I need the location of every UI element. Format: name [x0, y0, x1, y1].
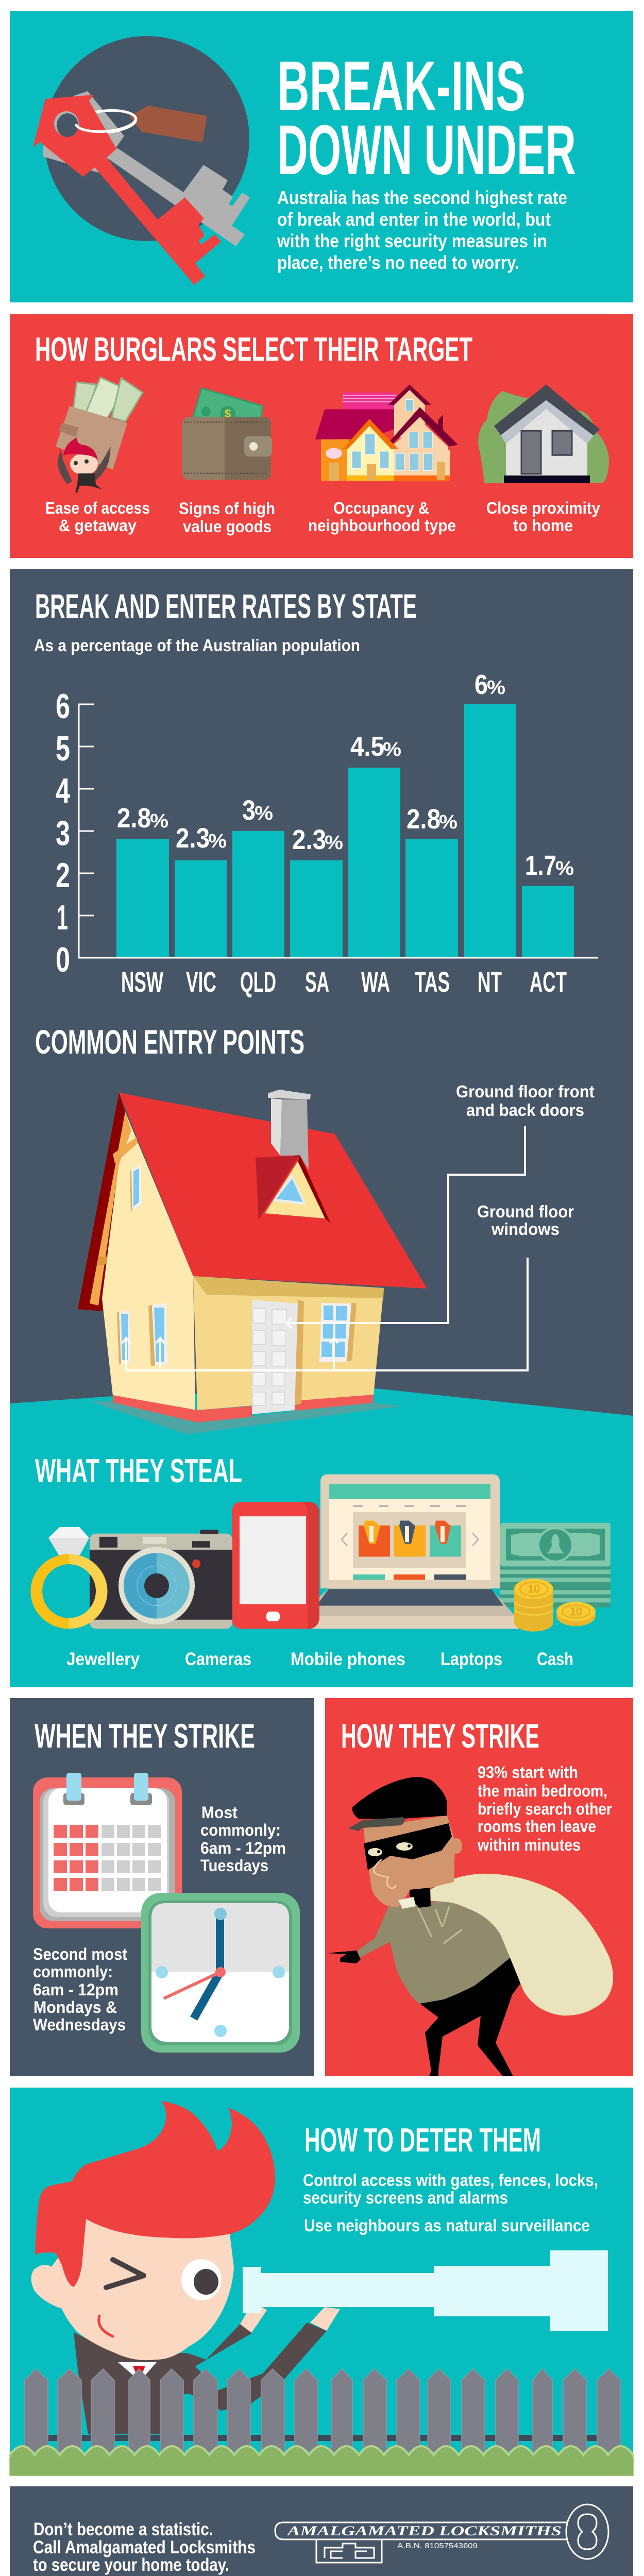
illustration: burglar: [327, 1777, 613, 2076]
fence: [25, 2369, 620, 2451]
stolen item labels: Laptops: [440, 1649, 502, 1669]
icon: calendar: [33, 1773, 182, 1928]
text: second most commonly: Second most: [33, 1945, 127, 1963]
text: most commonly: Tuesdays: [200, 1856, 268, 1875]
ground shadow: [90, 1401, 402, 1434]
icon labels: neighbourhood type: [308, 516, 456, 535]
icon: diamond ring: [30, 1527, 108, 1629]
icon: dark circle: [44, 36, 249, 241]
panel: ground and what they steal: [10, 1388, 633, 1687]
icon: grey key: [43, 91, 250, 246]
text: 93 percent: [477, 1763, 612, 1854]
label: doors: [456, 1082, 595, 1120]
bar chart: [56, 669, 598, 998]
y axis labels: 1: [57, 898, 68, 937]
call to action: [33, 2519, 256, 2575]
y axis labels: 2: [56, 856, 70, 895]
icon: coins: [514, 1579, 596, 1632]
icon: coins: 10: [528, 1583, 540, 1596]
bar value labels: %: [487, 677, 505, 699]
bar value labels: %: [555, 858, 574, 879]
bar value labels: %: [383, 739, 401, 760]
intro text: Australia has the second highest rate: [277, 187, 567, 208]
icon: man carrying wallet: [56, 378, 143, 493]
heading: break and enter rates: [34, 587, 417, 655]
icon: brown wallet with cash: $: [225, 408, 231, 420]
text: most commonly: 6am - 12pm: [200, 1839, 286, 1857]
icon: grey house with trees: [478, 384, 609, 483]
icon: phone: [232, 1502, 319, 1629]
intro text: place, there’s no need to worry.: [277, 252, 519, 273]
bar value labels: %: [255, 803, 273, 824]
text: second most commonly: 6am - 12pm: [33, 1980, 118, 1999]
logo: amalgamated locksmiths key: [275, 2504, 608, 2563]
heading: what they steal: WHAT THEY STEAL: [35, 1452, 242, 1489]
bar value labels: %: [325, 832, 343, 854]
icon labels: Close proximity: [486, 499, 600, 517]
bar value labels: 2.8: [117, 803, 151, 834]
text: 93 percent: rooms then leave: [478, 1817, 596, 1836]
icon: key tag: [129, 106, 207, 142]
text: most commonly: commonly:: [200, 1821, 281, 1839]
panel: footer: [10, 2486, 633, 2576]
icon: laptop: [298, 1475, 521, 1629]
panel: rates and entry points background: [10, 569, 633, 1445]
text: second most commonly: [33, 1945, 127, 2034]
arrow: doors line: [286, 1126, 525, 1328]
icon labels: & getaway: [59, 516, 137, 535]
text: 93 percent: briefly search other: [478, 1800, 612, 1818]
icon labels: to home: [513, 516, 573, 535]
icon: camera: [90, 1530, 232, 1629]
y axis labels: 3: [56, 814, 70, 853]
call to action: Don’t become a statistic.: [33, 2519, 213, 2539]
icon: coins: 10: [570, 1605, 582, 1618]
stolen item labels: Jewellery: [66, 1649, 140, 1669]
intro text: with the right security measures in: [277, 230, 547, 251]
title: [277, 47, 576, 190]
heading: break and enter rates: BREAK AND ENTER RATES BY STATE: [35, 587, 417, 625]
x axis labels: TAS: [415, 965, 450, 998]
bar value labels: 2.3: [176, 823, 210, 854]
intro text: [277, 187, 567, 273]
icon labels: [45, 499, 600, 536]
icon: house: [78, 1090, 427, 1422]
x axis labels: NSW: [121, 965, 163, 998]
panel: how to deter them: [10, 2088, 633, 2476]
y axis labels: 0: [56, 940, 70, 979]
icon: clock: [141, 1893, 300, 2053]
text: 93 percent: within minutes: [477, 1836, 581, 1854]
text: deterrents: Control access with gates, fences, locks,: [303, 2171, 598, 2190]
bar value labels: 6: [474, 669, 488, 700]
bar value labels: %: [439, 811, 457, 833]
text: second most commonly: commonly:: [33, 1962, 113, 1981]
logo: amalgamated locksmiths key: A.B.N. 81057543609: [397, 2541, 478, 2550]
call to action: to secure your home today.: [33, 2555, 229, 2575]
x axis labels: NT: [478, 965, 502, 998]
panel: how burglars select their target: [10, 314, 633, 558]
stolen item labels: Mobile phones: [291, 1649, 405, 1669]
bar value labels: %: [150, 810, 168, 832]
grass: [10, 2446, 633, 2475]
text: deterrents: [303, 2171, 598, 2235]
icon: cash: [500, 1523, 611, 1607]
stolen item labels: Cameras: [185, 1649, 251, 1669]
bar value labels: 1.7: [525, 850, 556, 881]
icon: colourful houses: [315, 384, 458, 481]
panel: hero: [10, 11, 633, 302]
icon: telescope: [243, 2250, 608, 2331]
icon labels: Occupancy &: [333, 499, 429, 517]
y axis labels: 4: [56, 771, 70, 810]
icon: brown wallet with cash: [182, 388, 272, 480]
panel: when they strike: [10, 1698, 314, 2076]
x axis labels: [121, 965, 567, 998]
label: windows: Ground floor: [477, 1202, 574, 1221]
bar value labels: 3: [242, 795, 256, 826]
y axis labels: 5: [56, 729, 70, 768]
x axis labels: SA: [305, 965, 329, 998]
logo: amalgamated locksmiths key: AMALGAMATED LOCKSMITHS: [286, 2523, 562, 2538]
heading: common entry points: COMMON ENTRY POINTS: [35, 1023, 304, 1061]
bar value labels: 2.8: [406, 804, 440, 835]
illustration: man with telescope: [31, 2101, 340, 2434]
windows: [117, 1164, 357, 1366]
call to action: Call Amalgamated Locksmiths: [33, 2537, 256, 2557]
icon labels: value goods: [183, 517, 272, 536]
bar value labels: 4.5: [350, 731, 384, 762]
text: 93 percent: 93% start with: [478, 1763, 578, 1782]
y axis labels: [56, 687, 70, 979]
x axis labels: ACT: [530, 965, 567, 998]
door: [252, 1300, 304, 1414]
icon labels: Ease of access: [45, 499, 150, 517]
y axis labels: 6: [56, 687, 70, 726]
text: deterrents: Use neighbours as natural surveillance: [304, 2216, 590, 2235]
bar value labels: [117, 669, 574, 881]
stolen item labels: Cash: [537, 1649, 573, 1669]
bar value labels: %: [208, 831, 227, 852]
label: windows: windows: [491, 1219, 560, 1239]
text: deterrents: security screens and alarms: [303, 2188, 508, 2207]
text: second most commonly: Wednesdays: [33, 2015, 126, 2034]
bar value labels: 2.3: [292, 824, 326, 855]
label: doors: Ground floor front: [456, 1082, 595, 1101]
icon: red key: [33, 95, 221, 285]
text: 93 percent: the main bedroom,: [478, 1782, 607, 1800]
arrow: windows line: [122, 1258, 528, 1370]
icon: ring back: [74, 108, 137, 135]
heading: break and enter rates: As a percentage of the Australian population: [34, 636, 360, 655]
panel: how they strike: [325, 1698, 633, 2076]
text: second most commonly: Mondays &: [33, 1998, 117, 2016]
x axis labels: VIC: [186, 965, 216, 998]
stolen item labels: [66, 1649, 573, 1669]
heading: WHEN THEY STRIKE: [35, 1717, 255, 1755]
label: windows: [477, 1202, 574, 1239]
label: doors: and back doors: [466, 1100, 584, 1120]
text: most commonly: [200, 1803, 286, 1875]
x axis labels: QLD: [240, 965, 276, 998]
icon labels: Signs of high: [179, 499, 275, 518]
icon: ring front: [76, 119, 136, 131]
intro text: of break and enter in the world, but: [277, 209, 551, 230]
text: most commonly: Most: [201, 1803, 238, 1822]
x axis labels: WA: [361, 965, 390, 998]
